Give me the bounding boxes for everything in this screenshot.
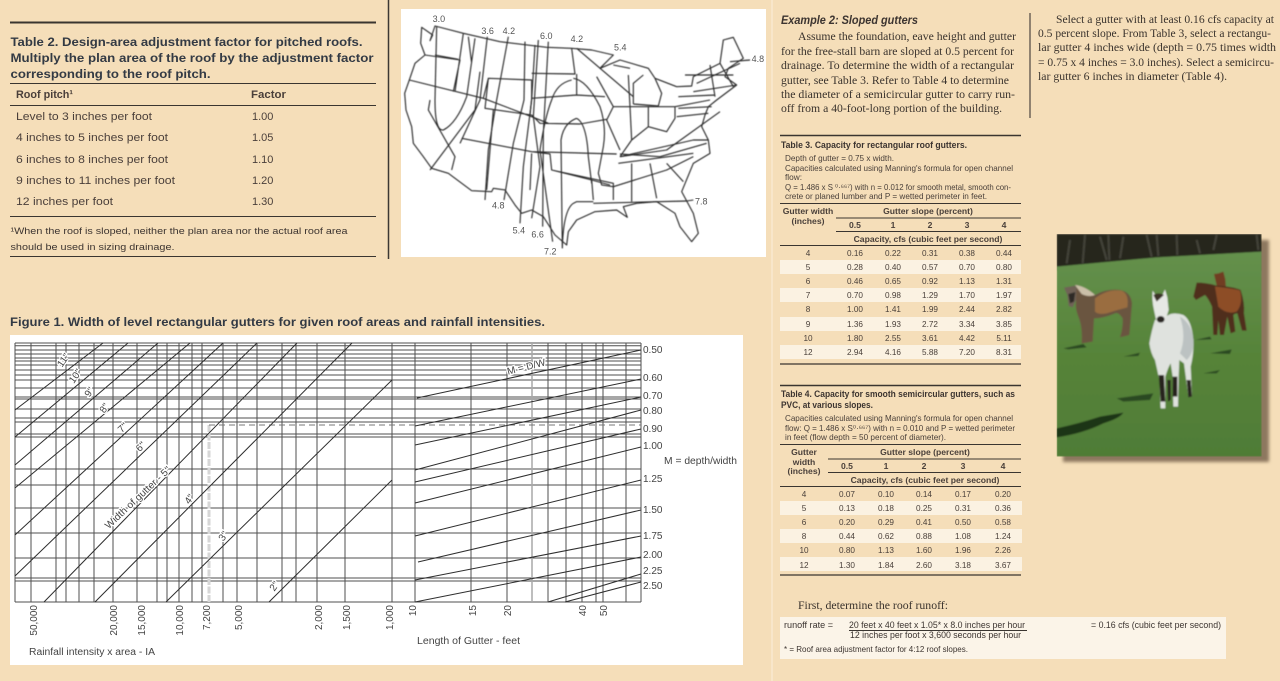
- table 3 data: 1.31: [996, 277, 1012, 286]
- heading: Table 4 title: Table 4. Capacity for smooth semicircular gutters, such as: [781, 389, 1015, 400]
- table 4 data: 4: [802, 490, 807, 499]
- map linework: US states and rainfall isolines: [405, 26, 750, 248]
- map rainfall labels: 3.6: [481, 26, 494, 36]
- panel: Table 2 design-area adjustment factor: [10, 22, 376, 256]
- heading: Table 2 title: Multiply the plan area of the roof by the adjustment factor: [10, 51, 374, 65]
- text block: gutter selection: 0.5 percent slope. From Table 3, select a rectangu-: [1038, 27, 1271, 40]
- map rainfall labels: 4.8: [752, 54, 764, 64]
- table 3 data: 5.11: [996, 334, 1012, 343]
- axis labels: rainfall intensity x area: 2,000: [314, 605, 325, 630]
- table 3 data: 0.28: [847, 263, 863, 272]
- chart grid lines: [15, 343, 641, 602]
- map rainfall labels: 5.4: [614, 43, 626, 53]
- text block: Example 2 sloped gutters: [781, 15, 1016, 115]
- table header row: [16, 89, 287, 101]
- map rainfall labels: 6.6: [531, 230, 544, 240]
- table 3 data: 1.93: [885, 320, 901, 329]
- table 3 data: 1.70: [959, 291, 975, 300]
- table body rows: 1.30: [252, 196, 273, 208]
- axis labels: M ratio scale: 1.00: [643, 441, 663, 452]
- map rainfall labels: 4.2: [571, 34, 583, 44]
- table 4 data: 1.13: [878, 546, 894, 555]
- table 3 data: 7: [806, 291, 811, 300]
- table 3 data: 0.57: [922, 263, 938, 272]
- table 4 header: 0.5: [841, 461, 853, 471]
- heading: Figure 1 title: Figure 1. Width of level rectangular gutters for given roof areas and rainfall intensities.: [10, 315, 545, 329]
- axis labels: rainfall intensity x area: 10,000: [175, 605, 186, 636]
- table 4 notes: [785, 414, 1015, 442]
- table header row: Factor: [251, 89, 287, 101]
- table 4 data: 8: [802, 532, 807, 541]
- body column 1: gutter, see Table 3. Refer to Table 4 to determine: [781, 74, 1009, 87]
- panel: US rainfall map: [401, 9, 766, 257]
- map rainfall labels: 6.0: [540, 31, 552, 41]
- text block: gutter selection: lar gutter 4 inches wide (depth = 0.75 times width: [1038, 41, 1276, 54]
- formula footnote: * = Roof area adjustment factor for 4:12 roof slopes.: [784, 645, 968, 654]
- table 4 data: 0.25: [916, 504, 932, 513]
- table 4 data: 1.30: [839, 561, 855, 570]
- table 4 notes: flow: Q = 1.486 x S⁰·⁶⁶⁷) with n = 0.010 and P = wetted perimeter: [785, 424, 1015, 433]
- table 3 header: Capacity, cfs (cubic feet per second): [854, 234, 1003, 244]
- table 4 data: 2.26: [995, 546, 1011, 555]
- body column 1: [781, 30, 1016, 115]
- map rainfall labels: 5.4: [513, 225, 525, 235]
- table 4 data: 0.36: [995, 504, 1011, 513]
- diagonal line labels: 8": [98, 401, 112, 415]
- text block: gutter selection: = 0.75 x 4 inches = 3.0 inches). Select a semicircu-: [1038, 56, 1274, 69]
- table 4 data: 0.31: [955, 504, 971, 513]
- formula fraction: 12 inches per foot x 3,600 seconds per hour: [850, 630, 1021, 641]
- table 3 data: 0.65: [885, 277, 901, 286]
- table 3 data: 0.31: [922, 249, 938, 258]
- table 3 header: (inches): [792, 216, 825, 226]
- table 3 header: 4: [1002, 220, 1007, 230]
- table 4 data: 0.17: [955, 490, 971, 499]
- table footnote: [10, 226, 348, 253]
- table 4 data: 0.20: [995, 490, 1011, 499]
- axis labels: rainfall intensity x area: 1,500: [342, 605, 353, 630]
- table body rows: 4 inches to 5 inches per foot: [16, 132, 168, 144]
- axis title: M definition: M = depth/width: [664, 456, 737, 467]
- map rainfall labels: 7.8: [695, 197, 707, 207]
- table 3 data: 3.85: [996, 320, 1012, 329]
- axis labels: rainfall intensity x area: 40: [578, 605, 589, 616]
- axis labels: M ratio scale: 0.60: [643, 373, 663, 384]
- table 3 data: 7.20: [959, 348, 975, 357]
- axis labels: M ratio scale: 1.25: [643, 474, 663, 485]
- table 3 data: [803, 249, 1012, 357]
- text block: gutter selection: Select a gutter with at least 0.16 cfs capacity at: [1056, 13, 1275, 26]
- table 4 data: 0.41: [916, 518, 932, 527]
- table 4 header: Gutter: [791, 447, 818, 457]
- table 4 data: 0.80: [839, 546, 855, 555]
- table 4 header: 1: [884, 461, 889, 471]
- table header row: Roof pitch¹: [16, 89, 73, 101]
- table 4 data: [799, 490, 1011, 570]
- diagonal line labels: M = D/W: [506, 357, 547, 378]
- table 3 data: 0.98: [885, 291, 901, 300]
- table body rows: Level to 3 inches per foot: [16, 111, 152, 123]
- table 4 data: 10: [799, 546, 809, 555]
- table 4 data: 0.10: [878, 490, 894, 499]
- table 3 data: 1.97: [996, 291, 1012, 300]
- table 4 data: 0.13: [839, 504, 855, 513]
- table 4 data: 1.84: [878, 561, 894, 570]
- axis labels: M ratio scale: 2.25: [643, 566, 663, 577]
- table 4 data: 0.07: [839, 490, 855, 499]
- table 4 header: 4: [1001, 461, 1006, 471]
- axis labels: rainfall intensity x area: 20: [503, 605, 514, 616]
- body column 1: the diameter of a semicircular gutter to carry run-: [781, 88, 1015, 101]
- formula fraction: [849, 620, 1027, 641]
- table 3 header: [783, 206, 1007, 244]
- heading: Table 3 title: Table 3. Capacity for rectangular roof gutters.: [781, 140, 967, 151]
- chart reference dashes: [209, 425, 641, 602]
- table body rows: 1.20: [252, 175, 273, 187]
- formula fraction: 20 feet x 40 feet x 1.05* x 8.0 inches per hour: [849, 620, 1025, 631]
- table 3 data: 1.00: [847, 305, 863, 314]
- table 3 data: 3.61: [922, 334, 938, 343]
- table 3 data: 1.80: [847, 334, 863, 343]
- table body rows: 1.10: [252, 154, 273, 166]
- diagonal line labels: 3": [217, 529, 231, 543]
- table 3 data: 10: [803, 334, 813, 343]
- body column 1: for the free-stall barn are sloped at 0.5 percent for: [781, 45, 1014, 58]
- table 3 data: 1.41: [885, 305, 901, 314]
- axis labels: M ratio scale: 2.50: [643, 581, 663, 592]
- table 4 data: 0.50: [955, 518, 971, 527]
- table body rows: 1.00: [252, 111, 273, 123]
- table 4 data: 0.18: [878, 504, 894, 513]
- table 4 data: 0.20: [839, 518, 855, 527]
- table body rows: 9 inches to 11 inches per foot: [16, 175, 175, 187]
- map rainfall labels: 3.0: [433, 14, 445, 24]
- table 3 data: 2.82: [996, 305, 1012, 314]
- table 3 header: 1: [891, 220, 896, 230]
- axis labels: M ratio scale: 2.00: [643, 550, 663, 561]
- table 4 data: 1.08: [955, 532, 971, 541]
- callout: runoff rate formula: [780, 617, 1226, 659]
- table 3 data: 8: [806, 305, 811, 314]
- table 4 data: 5: [802, 504, 807, 513]
- table 3 data: 0.46: [847, 277, 863, 286]
- table 4 header: 2: [922, 461, 927, 471]
- table footnote: should be used in sizing drainage.: [10, 242, 174, 253]
- axis labels: rainfall intensity x area: 20,000: [109, 605, 120, 636]
- table 3 data: 0.38: [959, 249, 975, 258]
- table 3 data: 4: [806, 249, 811, 258]
- table footnote: ¹When the roof is sloped, neither the plan area nor the actual roof area: [10, 226, 348, 237]
- table 3 data: 5: [806, 263, 811, 272]
- table 3 data: 2.44: [959, 305, 975, 314]
- table 3 data: 2.72: [922, 320, 938, 329]
- diagonal line labels: 4": [183, 492, 197, 506]
- text block: gutter selection: lar gutter 6 inches in diameter (Table 4).: [1038, 70, 1227, 83]
- table 4 data: 1.24: [995, 532, 1011, 541]
- table 4 data: 2.60: [916, 561, 932, 570]
- diagonal line labels: 9": [83, 385, 97, 399]
- table 4 data: 1.96: [955, 546, 971, 555]
- body column 1: Assume the foundation, eave height and gutter: [798, 30, 1016, 43]
- heading: Table 2 title: Table 2. Design-area adjustment factor for pitched roofs.: [10, 35, 362, 49]
- panel: Table 3 rectangular gutter capacity: [780, 136, 1021, 364]
- table 3 notes: Q = 1.486 x S ⁰·⁶⁶⁷) with n = 0.012 for smooth metal, smooth con-: [785, 183, 1011, 192]
- table 3 data: 12: [803, 348, 813, 357]
- table 3 data: 0.70: [847, 291, 863, 300]
- axis labels: rainfall intensity x area: 10: [408, 605, 419, 616]
- map rainfall labels: 4.2: [503, 26, 515, 36]
- body column 1: drainage. To determine the width of a rectangular: [781, 59, 1014, 72]
- table 4 data: 6: [802, 518, 807, 527]
- photo: horses in a pasture: [1057, 234, 1269, 462]
- panel: Figure 1 gutter nomograph: [10, 335, 743, 665]
- table 4 header: 3: [961, 461, 966, 471]
- axis title: rainfall intensity: Rainfall intensity x area - IA: [29, 647, 155, 658]
- table 4 data: 0.29: [878, 518, 894, 527]
- axis labels: rainfall intensity x area: 50,000: [29, 605, 40, 636]
- table 4 notes: Capacities calculated using Manning's formula for open channel: [785, 414, 1013, 423]
- table 3 data: 0.16: [847, 249, 863, 258]
- table 3 data: 6: [806, 277, 811, 286]
- table 3 data: 2.94: [847, 348, 863, 357]
- axis labels: rainfall intensity x area: 50: [599, 605, 610, 616]
- table 3 data: 5.88: [922, 348, 938, 357]
- formula result: = 0.16 cfs (cubic feet per second): [1091, 620, 1221, 631]
- table 3 notes: flow:: [785, 173, 802, 182]
- table 4 shaded rows: [780, 501, 1022, 571]
- table 4 data: 0.44: [839, 532, 855, 541]
- axis labels: rainfall intensity x area: 1,000: [385, 605, 396, 630]
- panel: Table 4 semicircular gutter capacity: [780, 386, 1022, 575]
- axis title: length of gutter: Length of Gutter - feet: [417, 636, 520, 647]
- table 3 shaded rows: [780, 260, 1021, 359]
- formula label: runoff rate =: [784, 620, 833, 631]
- table 4 header: width: [792, 457, 815, 467]
- table 4 data: 0.88: [916, 532, 932, 541]
- table 4 header: (inches): [788, 466, 821, 476]
- table 3 data: 0.70: [959, 263, 975, 272]
- table body rows: 6 inches to 8 inches per foot: [16, 154, 168, 166]
- table 3 data: 0.44: [996, 249, 1012, 258]
- table 3 data: 0.40: [885, 263, 901, 272]
- map rainfall labels: 7.2: [544, 246, 556, 256]
- table 3 header: 2: [928, 220, 933, 230]
- map rainfall labels: 4.8: [492, 200, 504, 210]
- table 3 data: 1.29: [922, 291, 938, 300]
- table 4 data: 3.18: [955, 561, 971, 570]
- table 3 header: Gutter slope (percent): [883, 206, 973, 216]
- axis labels: M ratio scale: 1.75: [643, 531, 663, 542]
- diagonal line labels: [55, 351, 547, 593]
- table 3 header: 0.5: [849, 220, 861, 230]
- sloped depth-width ratio lines: [415, 350, 641, 602]
- table 3 header: Gutter width: [783, 206, 833, 216]
- table 4 notes: in feet (flow depth = 50 percent of diameter).: [785, 433, 946, 442]
- table 3 data: 4.42: [959, 334, 975, 343]
- table 3 data: 1.13: [959, 277, 975, 286]
- heading: Table 2 title: corresponding to the roof pitch.: [10, 67, 210, 81]
- table 3 data: 9: [806, 320, 811, 329]
- axis labels: M ratio scale: 0.80: [643, 406, 663, 417]
- diagonal line labels: 11": [55, 351, 73, 369]
- subheading: Example 2: Example 2: Sloped gutters: [781, 15, 918, 27]
- table 3 notes: [785, 154, 1013, 201]
- table 4 data: 1.60: [916, 546, 932, 555]
- heading: Table 4 title: PVC, at various slopes.: [781, 400, 873, 411]
- axis labels: rainfall intensity x area: 7,200: [202, 605, 213, 630]
- table 3 data: 4.16: [885, 348, 901, 357]
- table 3 data: 0.80: [996, 263, 1012, 272]
- table body rows: 12 inches per foot: [16, 196, 113, 208]
- axis labels: rainfall intensity x area: 15,000: [137, 605, 148, 636]
- axis labels: rainfall intensity x area: 5,000: [234, 605, 245, 630]
- text block: gutter selection: [1038, 13, 1276, 83]
- table body rows: [16, 111, 273, 208]
- table 3 data: 0.92: [922, 277, 938, 286]
- diagonal line labels: 7": [116, 421, 131, 435]
- table 3 data: 1.99: [922, 305, 938, 314]
- axis labels: M ratio scale: 1.50: [643, 505, 663, 516]
- map rainfall labels: [433, 14, 764, 256]
- body column 1: off from a 40-foot-long portion of the building.: [781, 102, 1002, 115]
- table 4 data: 0.62: [878, 532, 894, 541]
- table 3 notes: crete or planed lumber and P = wetted perimeter in feet.: [785, 192, 987, 201]
- table 3 notes: Capacities calculated using Manning's formula for open channel: [785, 164, 1013, 173]
- table 3 data: 1.36: [847, 320, 863, 329]
- table 3 data: 0.22: [885, 249, 901, 258]
- axis labels: M ratio scale: 0.90: [643, 424, 663, 435]
- diagonal line labels: 10": [67, 367, 85, 386]
- table body rows: 1.05: [252, 132, 273, 144]
- text: first determine the roof runoff: First, determine the roof runoff:: [798, 599, 948, 612]
- axis labels: M ratio scale: 0.50: [643, 345, 663, 356]
- table 3 data: 8.31: [996, 348, 1012, 357]
- table 4 header: [788, 447, 1006, 485]
- axis labels: M ratio scale: 0.70: [643, 391, 663, 402]
- table 3 notes: Depth of gutter = 0.75 x width.: [785, 154, 894, 163]
- diagonal line labels: Width of gutter - 5": [103, 465, 174, 532]
- axis labels: rainfall intensity x area: 15: [468, 605, 479, 616]
- heading: Table 2 title: [10, 35, 374, 81]
- table 4 data: 0.14: [916, 490, 932, 499]
- heading: Table 4 title: [781, 389, 1015, 411]
- table 3 data: 2.55: [885, 334, 901, 343]
- table 3 header: 3: [965, 220, 970, 230]
- table 4 header: Gutter slope (percent): [880, 447, 970, 457]
- diagonal line labels: 6": [134, 440, 149, 454]
- table 3 data: 3.34: [959, 320, 975, 329]
- table 4 data: 0.58: [995, 518, 1011, 527]
- table 4 header: Capacity, cfs (cubic feet per second): [851, 475, 1000, 485]
- table 4 data: 12: [799, 561, 809, 570]
- table 4 data: 3.67: [995, 561, 1011, 570]
- axis labels: M ratio scale: [643, 345, 663, 592]
- axis labels: rainfall intensity x area: [29, 605, 610, 636]
- diagonal gutter width lines: [15, 343, 392, 602]
- diagonal line labels: 2": [268, 579, 282, 593]
